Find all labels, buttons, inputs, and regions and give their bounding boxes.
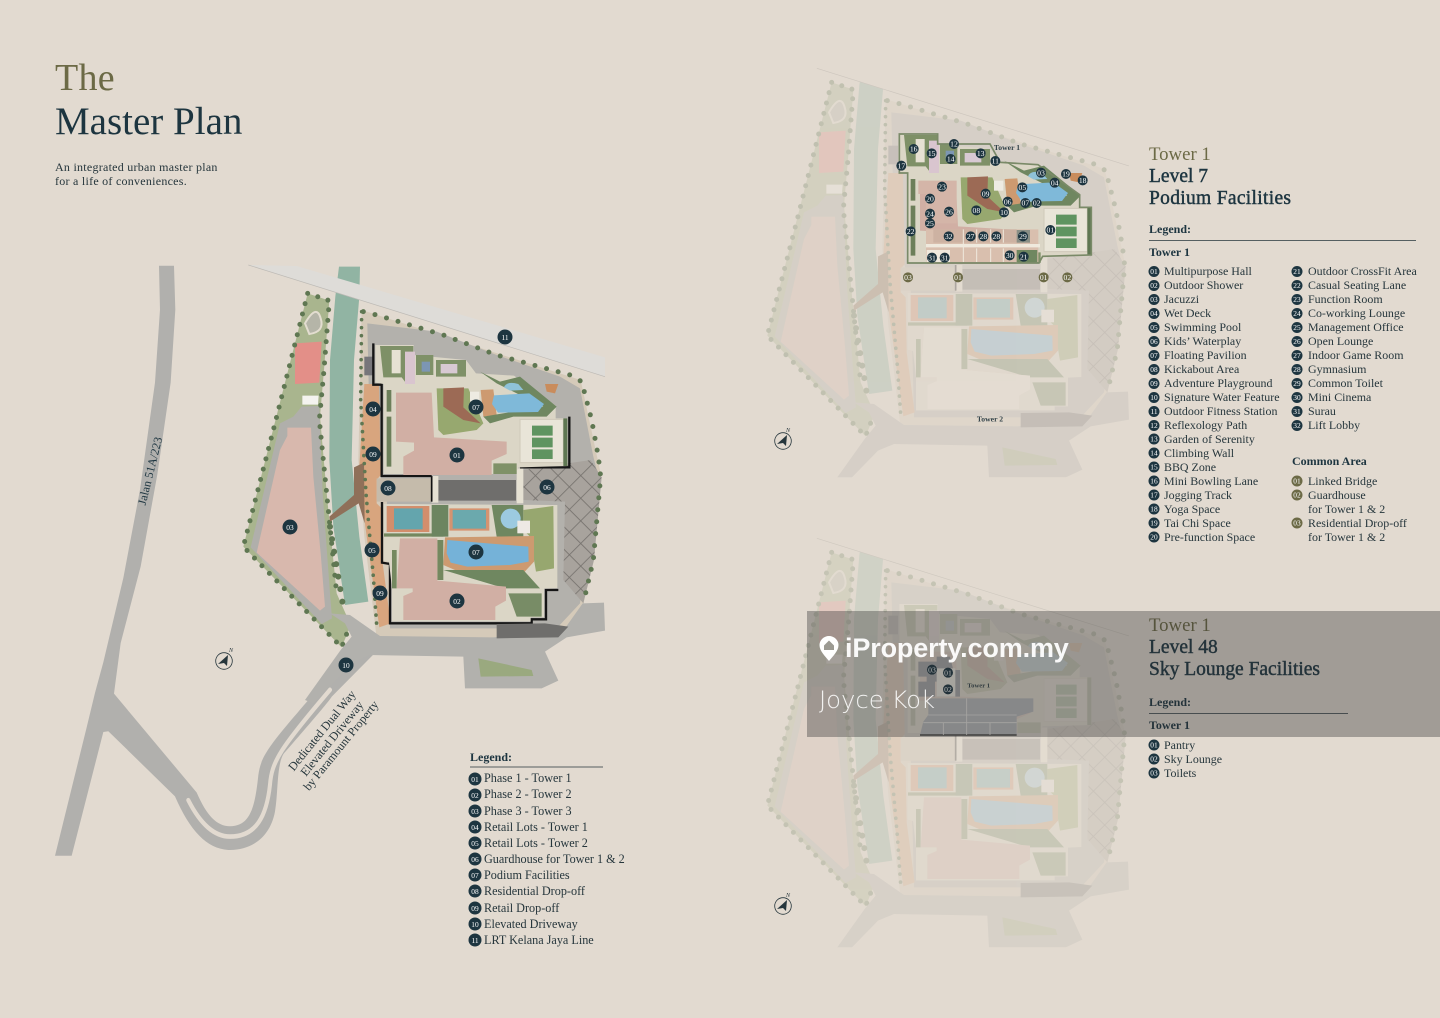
legend: master plan: 04 (471, 823, 479, 832)
level 7 number markers: 17 (898, 161, 905, 170)
legend column 1: 02 (1150, 281, 1158, 290)
legend: common area: Linked Bridge (1308, 474, 1377, 488)
level 7 number markers: Tower 1 (994, 143, 1020, 152)
level 7 number markers: 22 (907, 227, 915, 236)
legend column 1: 10 (1150, 393, 1158, 402)
level 7 number markers: 32 (945, 232, 953, 241)
level 48 sky lounge plan: Tower 1 (967, 682, 990, 689)
legend column 1: BBQ Zone (1164, 460, 1216, 474)
level 7 number markers: 01 (1040, 273, 1048, 282)
master plan number markers: 07 (472, 548, 480, 557)
legend column 2: 28 (1293, 365, 1301, 374)
legend column 1: Outdoor Fitness Station (1164, 404, 1277, 418)
legend column 2: Casual Seating Lane (1308, 278, 1406, 292)
level 7 number markers: 26 (945, 207, 953, 216)
legend: master plan (468, 750, 625, 947)
legend column 2: Mini Cinema (1308, 390, 1372, 404)
road: Jalan 51A/223 and dedicated dual way (55, 266, 373, 856)
legend: common area: 03 (1293, 518, 1301, 528)
legend: master plan: 03 (471, 807, 479, 816)
level 7 number markers: 06 (1004, 197, 1012, 206)
level 7 number markers: 30 (1006, 251, 1014, 260)
legend column 1: 17 (1150, 490, 1158, 500)
legend: level 48 (1148, 695, 1348, 780)
legend column 1: 03 (1150, 295, 1158, 304)
legend: master plan: 07 (471, 871, 479, 880)
legend column 2: Surau (1308, 404, 1336, 418)
legend: master plan: 10 (471, 920, 479, 929)
compass: level 7 (775, 428, 791, 449)
level 7 number markers: 14 (947, 155, 955, 164)
level 7 number markers: 18 (1079, 176, 1087, 185)
legend column 1: Wet Deck (1164, 306, 1211, 320)
master plan number markers: 01 (453, 451, 461, 460)
level 7 number markers: 09 (982, 189, 990, 198)
legend: master plan: 05 (471, 839, 479, 848)
level 7 number markers: 03 (904, 273, 912, 282)
legend: common area: for Tower 1 & 2 (1308, 502, 1385, 516)
legend column 2: Management Office (1308, 320, 1404, 334)
legend: master plan: 01 (471, 775, 479, 784)
master plan number markers (282, 330, 554, 672)
watermark band (807, 611, 1440, 737)
level 48 sky lounge plan (918, 657, 1033, 735)
level 48 sky lounge plan: 01 (944, 668, 952, 677)
level 7 number markers: 08 (973, 206, 980, 215)
legend column 1: 20 (1150, 532, 1158, 542)
level 7 number markers: 01 (954, 273, 962, 282)
legend: level 48: 01 (1150, 740, 1158, 750)
legend: master plan: 06 (471, 855, 479, 864)
legend column 1: 14 (1150, 448, 1158, 458)
compass: level 48 (775, 893, 791, 914)
legend: master plan: Guardhouse for Tower 1 & 2 (484, 852, 625, 866)
legend: level 48: 02 (1150, 754, 1158, 764)
legend column 1: Kickabout Area (1164, 362, 1240, 376)
title: Master Plan (55, 100, 242, 143)
legend column 1: 01 (1150, 267, 1158, 276)
legend: master plan: Phase 2 - Tower 2 (484, 787, 572, 801)
legend: level 48: Pantry (1164, 738, 1195, 752)
level 7 number markers: 28 (993, 232, 1000, 241)
legend column 1: 05 (1150, 323, 1158, 332)
legend column 1: Multipurpose Hall (1164, 264, 1253, 278)
legend column 1: 18 (1150, 504, 1158, 514)
heading: level 48: Sky Lounge Facilities (1149, 659, 1320, 680)
legend column 1: 13 (1150, 434, 1158, 444)
master plan number markers: 05 (368, 546, 376, 555)
level 7 number markers: 25 (926, 219, 934, 228)
legend column 2: 29 (1293, 379, 1301, 388)
legend column 2: Gymnasium (1308, 362, 1367, 376)
legend: master plan: 11 (471, 936, 479, 945)
heading: level 7 (1149, 144, 1291, 209)
legend: master plan: 08 (471, 887, 479, 896)
master plan number markers: 09 (376, 589, 384, 598)
legend column 1: Signature Water Feature (1164, 390, 1280, 404)
legend: master plan: Legend: (470, 750, 512, 764)
ghosted site plan: level 7 (767, 56, 1129, 492)
master plan number markers: 04 (369, 405, 377, 414)
level 48 sky lounge plan: 03 (928, 665, 936, 674)
road label: dedicated dual way: Dedicated Dual Way (285, 687, 359, 774)
legend column 2: 21 (1293, 267, 1301, 276)
legend column 1: Yoga Space (1164, 502, 1220, 516)
level 7 number markers: 11 (992, 157, 999, 166)
level 7 number markers: 31 (928, 253, 936, 262)
watermark logo pin (820, 636, 838, 661)
legend: level 48: Legend: (1149, 695, 1191, 709)
level 7 number markers: 12 (950, 140, 958, 149)
legend column 1: Pre-function Space (1164, 530, 1255, 544)
legend: common area: Residential Drop-off (1308, 516, 1407, 530)
legend column 1: Swimming Pool (1164, 320, 1242, 334)
legend column 1: Adventure Playground (1164, 376, 1272, 390)
legend column 1: 07 (1150, 351, 1158, 360)
legend column 1: Mini Bowling Lane (1164, 474, 1258, 488)
ghosted site plan: level 48 (767, 526, 1129, 962)
master plan number markers: 08 (384, 484, 392, 493)
legend: common area: for Tower 1 & 2 (1308, 530, 1385, 544)
legend column 1: Jacuzzi (1164, 292, 1200, 306)
level 7 number markers: Tower 2 (977, 414, 1003, 423)
level 7 number markers: 23 (938, 182, 946, 191)
legend column 1: Tai Chi Space (1164, 516, 1231, 530)
heading: level 48: Tower 1 (1149, 615, 1211, 636)
level 7 number markers: 20 (926, 194, 934, 203)
level 7 number markers: 24 (926, 209, 934, 218)
legend: level 7: Tower 1 (1149, 245, 1190, 259)
road label: Jalan 51A/223: Jalan 51A/223 (135, 436, 165, 506)
title (55, 57, 242, 143)
level 48 sky lounge plan: 02 (944, 685, 952, 694)
intro text (55, 160, 218, 188)
legend: common area: Guardhouse (1308, 488, 1366, 502)
legend column 2: 22 (1293, 281, 1301, 290)
legend column 1: Garden of Serenity (1164, 432, 1255, 446)
legend: level 7 (1148, 222, 1417, 544)
legend: level 48: 03 (1150, 768, 1158, 778)
legend column 2: 32 (1293, 421, 1301, 430)
level 7 number markers (896, 139, 1088, 423)
level 7 number markers: 01 (1047, 226, 1054, 235)
legend: master plan: Elevated Driveway (484, 917, 579, 931)
legend: level 48: Sky Lounge (1164, 752, 1222, 766)
legend: common area: Common Area (1292, 454, 1367, 468)
legend column 2: Indoor Game Room (1308, 348, 1404, 362)
master plan number markers: 02 (453, 597, 461, 606)
legend column 2 (1292, 264, 1417, 432)
level 7 number markers: 31 (941, 253, 949, 262)
level 7 number markers: 13 (977, 149, 985, 158)
legend column 1: 04 (1150, 309, 1158, 318)
heading: level 7: Tower 1 (1149, 144, 1211, 165)
compass: master plan (216, 648, 234, 669)
legend column 1: 15 (1150, 462, 1158, 472)
legend: master plan: 09 (471, 904, 479, 913)
legend: master plan: LRT Kelana Jaya Line (484, 933, 594, 947)
intro text: for a life of conveniences. (55, 174, 187, 188)
master site plan (243, 265, 605, 703)
road label: dedicated dual way: Elevated Driveway (297, 698, 366, 779)
intro text: An integrated urban master plan (55, 160, 218, 174)
compass: master plan: N (228, 648, 234, 654)
legend column 1: 12 (1150, 421, 1158, 430)
legend: master plan: Phase 3 - Tower 3 (484, 804, 572, 818)
legend column 1: Outdoor Shower (1164, 278, 1243, 292)
level 7 podium plan for tower 1 (899, 134, 1091, 264)
legend column 2: 30 (1293, 393, 1301, 402)
legend column 1: Reflexology Path (1164, 418, 1247, 432)
legend: master plan: Retail Lots - Tower 1 (484, 820, 588, 834)
level 7 number markers: 07 (1022, 199, 1029, 208)
level 7 number markers: 02 (1064, 273, 1071, 282)
road label: dedicated dual way: by Paramount Property (300, 698, 381, 793)
master plan number markers: 06 (543, 483, 551, 492)
level 7 number markers: 27 (967, 232, 975, 241)
legend column 1: 11 (1150, 407, 1158, 416)
legend column 2: Open Lounge (1308, 334, 1373, 348)
compass: level 48: N (785, 893, 791, 899)
legend column 2: 31 (1293, 407, 1301, 416)
level 7 number markers: 16 (910, 145, 918, 154)
compass: level 7: N (785, 428, 791, 434)
legend: level 7: Legend: (1149, 222, 1191, 236)
legend column 2: 26 (1293, 337, 1301, 346)
level 7 number markers: 05 (1019, 183, 1026, 192)
legend column 2: Outdoor CrossFit Area (1308, 264, 1417, 278)
legend: master plan: Phase 1 - Tower 1 (484, 771, 572, 785)
legend column 1: Floating Pavilion (1164, 348, 1247, 362)
heading: level 48 (1149, 615, 1320, 680)
legend column 2: 23 (1293, 295, 1301, 304)
legend column 2: Function Room (1308, 292, 1383, 306)
legend column 1: Kids’ Waterplay (1164, 334, 1241, 348)
legend column 1: 09 (1150, 379, 1158, 388)
watermark band: iProperty.com.my (845, 633, 1069, 663)
title: The (55, 57, 115, 99)
legend: common area: 02 (1293, 490, 1301, 500)
watermark band: Joyce Kok (819, 685, 935, 714)
legend column 1: 19 (1150, 518, 1158, 528)
legend column 1: 06 (1150, 337, 1158, 346)
legend column 2: Co-working Lounge (1308, 306, 1405, 320)
legend column 2: 27 (1293, 351, 1301, 360)
level 7 number markers: 19 (1062, 170, 1070, 179)
legend column 2: Lift Lobby (1308, 418, 1360, 432)
legend column 2: 24 (1293, 309, 1301, 318)
level 7 number markers: 03 (1037, 168, 1045, 177)
legend column 1: Jogging Track (1164, 488, 1232, 502)
legend column 1 (1148, 264, 1280, 544)
master plan number markers: 09 (369, 450, 377, 459)
legend column 1: Climbing Wall (1164, 446, 1235, 460)
legend: master plan: Retail Lots - Tower 2 (484, 836, 588, 850)
level 7 number markers: 02 (1033, 199, 1041, 208)
level 7 number markers: 15 (928, 149, 936, 158)
level 7 number markers: 29 (1019, 232, 1027, 241)
level 7 number markers: 28 (980, 232, 987, 241)
legend: level 48: Tower 1 (1149, 718, 1190, 732)
level 7 number markers: 10 (1000, 208, 1008, 217)
legend: common area (1292, 454, 1407, 544)
heading: level 7: Podium Facilities (1149, 188, 1291, 209)
legend: master plan: 02 (471, 791, 479, 800)
heading: level 48: Level 48 (1149, 637, 1218, 658)
heading: level 7: Level 7 (1149, 166, 1208, 187)
master plan number markers: 10 (342, 661, 350, 670)
master plan number markers: 03 (286, 523, 294, 532)
legend column 1: 16 (1150, 476, 1158, 486)
legend column 2: Common Toilet (1308, 376, 1384, 390)
master plan number markers: 11 (501, 333, 509, 342)
level 7 number markers: 21 (1020, 252, 1028, 261)
legend: master plan: Podium Facilities (484, 868, 570, 882)
legend column 1: 08 (1150, 365, 1158, 374)
legend: level 48: Toilets (1164, 766, 1197, 780)
legend: common area: 01 (1293, 476, 1301, 486)
level 7 number markers: 04 (1051, 178, 1059, 187)
legend: master plan: Residential Drop-off (484, 884, 586, 898)
legend column 2: 25 (1293, 323, 1301, 332)
legend: master plan: Retail Drop-off (484, 901, 560, 915)
master plan number markers: 07 (472, 403, 480, 412)
